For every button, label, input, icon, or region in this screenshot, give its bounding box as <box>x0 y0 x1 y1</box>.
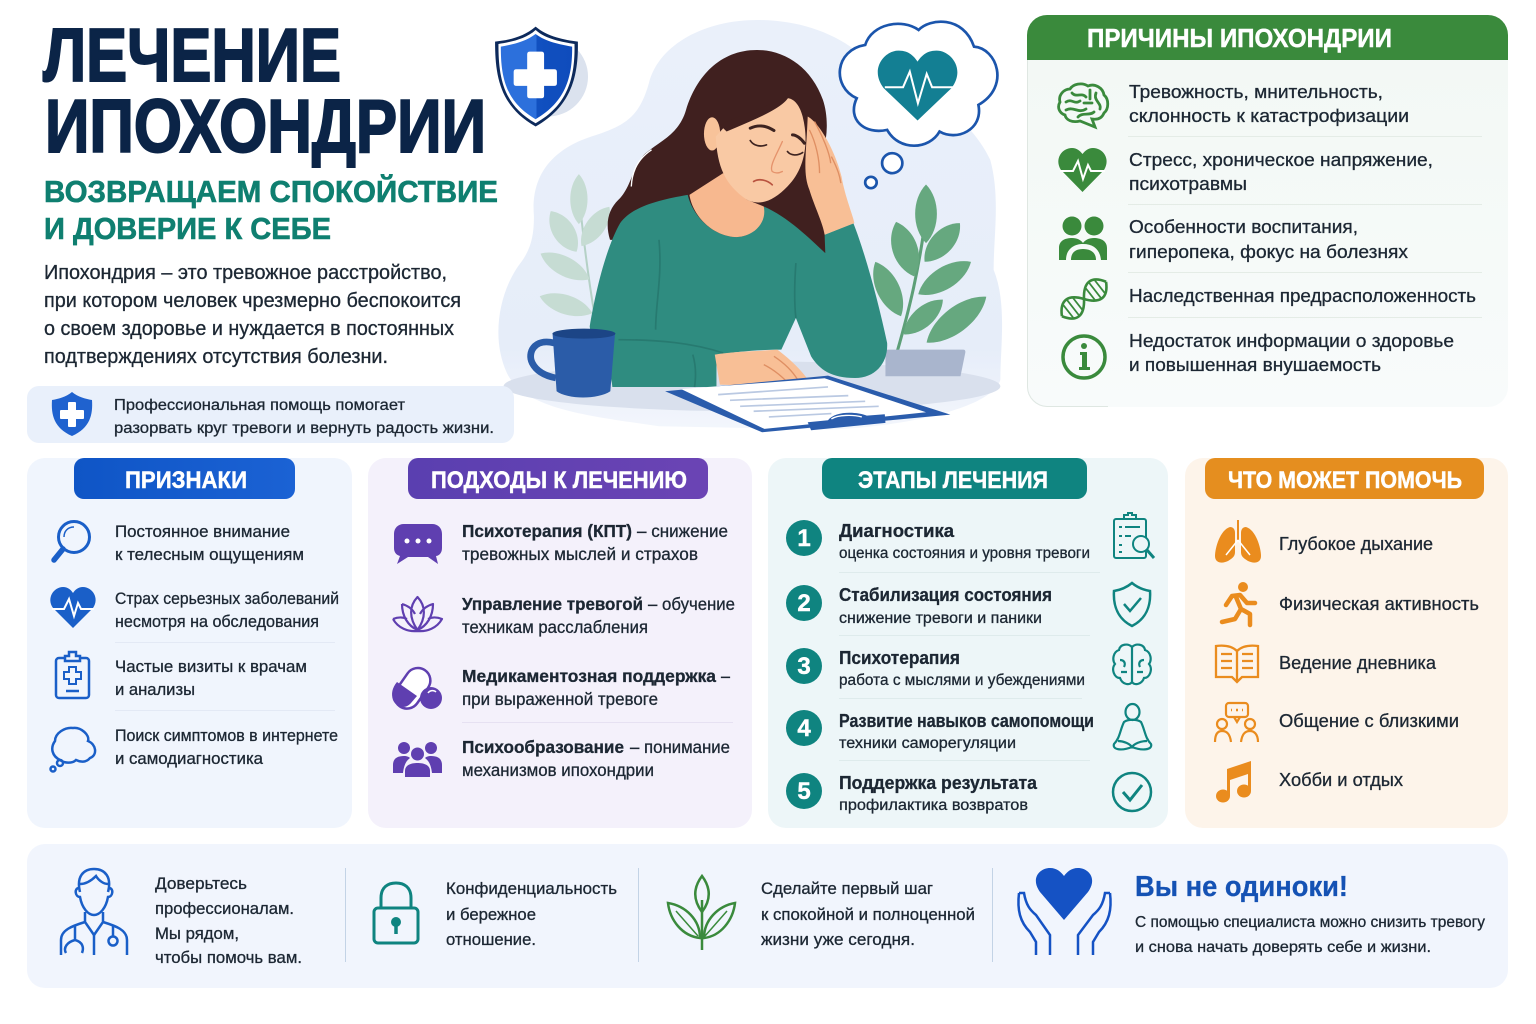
text: Психотерапия <box>839 648 960 668</box>
icon: clipboard search <box>1114 513 1154 558</box>
text: Тревожность, мнительность, <box>1129 81 1383 102</box>
text <box>839 773 1038 814</box>
text <box>1129 216 1409 262</box>
text: и снова начать доверять себе и жизни. <box>1135 939 1431 956</box>
text: несмотря на обследования <box>115 612 319 631</box>
text: – понимание <box>630 737 730 757</box>
icon: doctor <box>61 869 127 955</box>
block: confidentiality <box>374 879 617 949</box>
item: psychoeducation <box>393 737 730 780</box>
text <box>462 521 728 564</box>
clipboard <box>665 376 950 432</box>
table shadow <box>504 361 1000 411</box>
item: attention <box>54 522 304 564</box>
background blob <box>498 20 1002 430</box>
text: Сделайте первый шаг <box>761 879 933 898</box>
text: склонность к катастрофизации <box>1129 105 1409 126</box>
icon: runner <box>1222 582 1255 625</box>
facial features <box>750 126 804 185</box>
number badge <box>786 710 822 746</box>
number badge <box>786 520 822 556</box>
text: С помощью специалиста можно снизить тревогу <box>1135 914 1485 931</box>
text: Стабилизация состояния <box>839 585 1052 605</box>
callout text: Профессиональная помощь помогает <box>114 397 406 414</box>
text <box>115 589 339 631</box>
hair patch beside temple <box>806 150 820 170</box>
mug <box>531 329 615 398</box>
stage 3 <box>786 645 1151 689</box>
panel: signs <box>27 458 352 828</box>
text: Медикаментозная поддержка <box>462 666 716 686</box>
callout text: разорвать круг тревоги и вернуть радость жизни. <box>114 420 494 437</box>
text: работа с мыслями и убеждениями <box>839 672 1085 689</box>
text: Глубокое дыхание <box>1279 534 1433 554</box>
icon: check circle <box>1113 773 1151 811</box>
callout background <box>27 386 514 443</box>
text: Ведение дневника <box>1279 653 1437 673</box>
text: жизни уже сегодня. <box>761 930 915 949</box>
icon: meditation <box>1114 704 1151 749</box>
stage 4 <box>786 704 1151 752</box>
causes card <box>1027 15 1508 407</box>
text: Недостаток информации о здоровье <box>1129 330 1454 351</box>
text: при выраженной тревоге <box>462 689 658 709</box>
subtitle: И ДОВЕРИЕ К СЕБЕ <box>44 211 331 246</box>
shield icon <box>495 27 588 127</box>
text <box>761 879 975 949</box>
item: heredity <box>1055 273 1476 325</box>
text: Диагностика <box>839 521 955 541</box>
icon: heart <box>50 587 96 628</box>
intro text: о своем здоровье и нуждается в постоянных <box>44 318 454 340</box>
heading: Вы не одиноки! <box>1135 871 1348 903</box>
text: Особенности воспитания, <box>1129 216 1358 237</box>
text <box>1129 149 1433 194</box>
text <box>115 657 307 699</box>
text: к спокойной и полноценной <box>761 905 975 924</box>
hair highlight <box>631 150 652 186</box>
text <box>1135 914 1485 956</box>
item: hobby <box>1216 761 1403 802</box>
text: Физическая активность <box>1279 594 1479 614</box>
text: тревожных мыслей и страхов <box>462 544 698 564</box>
text: Доверьтесь <box>155 874 247 893</box>
icon: chat <box>394 524 442 564</box>
icon: heart with pulse <box>1058 148 1107 192</box>
text: техники саморегуляции <box>839 735 1016 752</box>
text: профессионалам. <box>155 899 294 918</box>
text: Частые визиты к врачам <box>115 657 307 676</box>
panel: footer <box>27 844 1508 988</box>
text: и самодиагностика <box>115 749 264 768</box>
text: механизмов ипохондрии <box>462 760 654 780</box>
item: journal <box>1216 646 1437 682</box>
text: Наследственная предрасположенность <box>1129 285 1476 306</box>
icon: brain <box>1113 645 1151 684</box>
text: Постоянное внимание <box>115 522 290 541</box>
stage 2 <box>786 583 1150 627</box>
item: lack of information <box>1063 330 1454 378</box>
helps heading: ЧТО МОЖЕТ ПОМОЧЬ <box>1228 467 1462 494</box>
icon: family <box>1059 216 1107 260</box>
block: you are not alone <box>1018 868 1485 956</box>
icon: clipboard <box>56 652 89 698</box>
text <box>1129 81 1409 126</box>
text: отношение. <box>446 930 536 949</box>
item: medication <box>390 663 730 713</box>
icon: dna <box>1055 273 1113 325</box>
title <box>43 13 486 168</box>
text: к телесным ощущениям <box>115 545 304 564</box>
item: anxiety management <box>393 594 735 637</box>
neck <box>689 173 764 237</box>
fringe <box>720 96 789 132</box>
sweater folds <box>618 240 796 387</box>
face <box>716 98 806 203</box>
title: ИПОХОНДРИИ <box>45 84 486 168</box>
text: Хобби и отдых <box>1279 770 1403 790</box>
text: Психотерапия (КПТ) <box>462 521 632 541</box>
icon: sprout <box>668 876 735 950</box>
helps header <box>1205 458 1484 499</box>
sweater <box>590 195 887 387</box>
signs header <box>74 458 295 499</box>
text: и повышенная внушаемость <box>1129 354 1381 375</box>
icon: music note <box>1216 761 1251 802</box>
icon: shield with cross <box>52 392 92 436</box>
text: – снижение <box>637 521 728 541</box>
hair <box>608 50 828 256</box>
text: Общение с близкими <box>1279 711 1459 731</box>
text <box>462 594 735 637</box>
icon: brain <box>1059 84 1108 127</box>
number badge: 5 <box>797 778 811 805</box>
text: гиперопека, фокус на болезнях <box>1129 241 1409 262</box>
title: ЛЕЧЕНИЕ <box>43 13 341 97</box>
causes header <box>1027 15 1508 60</box>
text: психотравмы <box>1129 173 1247 194</box>
text: Развитие навыков самопомощи <box>839 711 1094 731</box>
number badge: 3 <box>797 653 811 680</box>
text: и бережное <box>446 905 536 924</box>
icon: info <box>1063 336 1105 378</box>
item: communication <box>1215 703 1459 742</box>
number badge <box>786 648 822 684</box>
icon: lock <box>374 883 418 943</box>
item: breathing <box>1215 520 1433 563</box>
signs card <box>27 458 352 828</box>
block: trust <box>61 869 302 967</box>
text <box>839 648 1085 689</box>
item: activity <box>1222 582 1479 625</box>
icon: pills <box>390 663 442 713</box>
text: оценка состояния и уровня тревоги <box>839 545 1090 562</box>
intro text: при котором человек чрезмерно беспокоится <box>44 290 461 312</box>
item: searching <box>50 726 338 772</box>
subtitle <box>44 173 498 246</box>
text: Поддержка результата <box>839 773 1038 793</box>
text <box>839 585 1052 627</box>
text <box>839 711 1094 752</box>
number badge: 2 <box>797 590 811 617</box>
intro text: подтверждениях отсутствия болезни. <box>44 346 388 368</box>
approaches card <box>368 458 752 828</box>
text: и анализы <box>115 680 195 699</box>
approaches header <box>408 458 708 499</box>
callout: professional help <box>27 386 514 443</box>
callout text <box>114 397 494 437</box>
block: first step <box>668 876 975 950</box>
icon: two people talking <box>1215 703 1258 742</box>
text: Конфиденциальность <box>446 879 617 898</box>
text <box>1129 330 1454 375</box>
stage 1 <box>786 513 1154 562</box>
text <box>155 874 302 967</box>
text <box>446 879 617 949</box>
number badge: 1 <box>797 525 811 552</box>
icon: shield check <box>1114 583 1150 626</box>
text: профилактика возвратов <box>839 797 1028 814</box>
icon: group <box>393 742 442 777</box>
stages card <box>768 458 1168 828</box>
panel: approaches <box>368 458 752 828</box>
number badge: 4 <box>797 715 811 742</box>
number badge <box>786 773 822 809</box>
icon: magnifier <box>54 522 90 560</box>
text <box>462 666 730 709</box>
text <box>839 521 1090 562</box>
text: Мы рядом, <box>155 924 239 943</box>
stages heading: ЭТАПЫ ЛЕЧЕНИЯ <box>858 467 1048 494</box>
text <box>115 726 338 768</box>
icon: open book <box>1216 646 1258 682</box>
resting hand <box>715 350 809 387</box>
panel: stages <box>768 458 1168 828</box>
intro text: Ипохондрия – это тревожное расстройство, <box>44 262 447 284</box>
pot <box>885 350 965 376</box>
item: fear <box>50 587 339 631</box>
text <box>462 737 730 780</box>
icon: lotus <box>393 597 442 631</box>
text: – <box>721 666 730 686</box>
text: Управление тревогой <box>462 594 643 614</box>
subtitle: ВОЗВРАЩАЕМ СПОКОЙСТВИЕ <box>44 173 498 209</box>
panel: what helps <box>1185 458 1508 828</box>
item: stress <box>1058 148 1433 194</box>
thought bubble <box>840 22 997 188</box>
ear <box>704 117 720 151</box>
signs heading: ПРИЗНАКИ <box>125 467 247 494</box>
text: снижение тревоги и паники <box>839 610 1042 627</box>
item: upbringing <box>1059 216 1409 262</box>
helps card <box>1185 458 1508 828</box>
text: Психообразование <box>462 737 624 757</box>
footer card <box>27 844 1508 988</box>
item: CBT <box>394 521 728 564</box>
number badge <box>786 585 822 621</box>
text: Страх серьезных заболеваний <box>115 589 339 608</box>
causes heading: ПРИЧИНЫ ИПОХОНДРИИ <box>1087 23 1392 53</box>
illustration: woman with headache <box>495 20 1002 432</box>
icon: heart in hands <box>1018 868 1111 955</box>
stage 5 <box>786 773 1151 814</box>
text: – обучение <box>648 594 735 614</box>
approaches heading: ПОДХОДЫ К ЛЕЧЕНИЮ <box>431 467 687 494</box>
raised hand <box>805 117 854 235</box>
text: техникам расслабления <box>462 617 648 637</box>
text <box>115 522 304 564</box>
plant right <box>865 184 994 352</box>
text: Поиск симптомов в интернете <box>115 726 338 745</box>
text: чтобы помочь вам. <box>155 948 302 967</box>
item: anxiety <box>1059 81 1409 127</box>
plant left <box>536 174 617 322</box>
intro text <box>44 262 461 368</box>
panel: causes <box>1027 15 1508 407</box>
stages header <box>822 458 1087 499</box>
item: visits <box>56 652 307 699</box>
text: Стресс, хроническое напряжение, <box>1129 149 1433 170</box>
icon: thought cloud <box>50 728 95 772</box>
icon: lungs <box>1215 520 1261 563</box>
